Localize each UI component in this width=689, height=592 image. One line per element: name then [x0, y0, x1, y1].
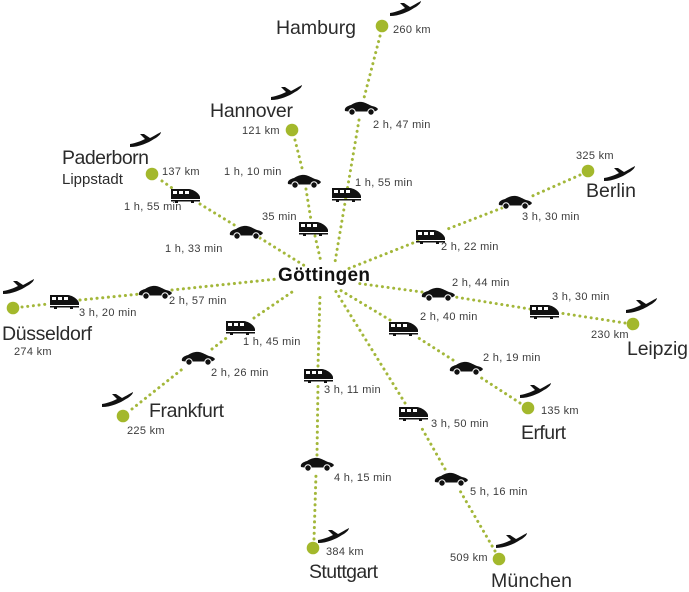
icon: train Leipzig	[530, 305, 559, 319]
icon: plane Erfurt	[520, 383, 551, 398]
icon: train Erfurt	[389, 322, 418, 336]
label: Stuttgart: Stuttgart	[309, 561, 379, 583]
icon: plane Paderborn	[130, 132, 161, 147]
icon: train Stuttgart	[304, 369, 333, 383]
icon: train Hamburg	[332, 188, 361, 202]
dot: Hannover	[286, 124, 298, 136]
time by train: Frankfurt: 1 h, 45 min	[243, 336, 301, 348]
time by car: Erfurt: 2 h, 19 min	[483, 352, 541, 364]
icon: car Düsseldorf	[139, 286, 172, 299]
time by car: Berlin: 3 h, 30 min	[522, 211, 580, 223]
icon: plane Düsseldorf	[3, 279, 34, 294]
time by train: Düsseldorf: 3 h, 20 min	[79, 307, 137, 319]
label: Hannover: Hannover	[210, 100, 294, 122]
icon: train Hannover	[299, 222, 328, 236]
dot: München	[493, 553, 505, 565]
dot: Berlin	[582, 165, 594, 177]
label: Erfurt: Erfurt	[521, 422, 567, 444]
label: Lippstadt: Lippstadt	[62, 171, 124, 188]
icon: train Düsseldorf	[50, 295, 79, 309]
icon: train Berlin	[416, 230, 445, 244]
time by car: Hannover: 1 h, 10 min	[224, 166, 282, 178]
time by train: München: 3 h, 50 min	[431, 418, 489, 430]
dot: Stuttgart	[307, 542, 319, 554]
route: Erfurt	[340, 290, 579, 444]
label: Leipzig: Leipzig	[627, 338, 688, 360]
route: Berlin	[345, 150, 636, 270]
route: Frankfurt	[102, 290, 301, 437]
distance: Hannover: 121 km	[242, 125, 280, 137]
label: Düsseldorf: Düsseldorf	[2, 323, 93, 345]
distance: Berlin: 325 km	[576, 150, 614, 162]
icon: car Hannover	[288, 175, 321, 188]
icon: car Paderborn	[230, 226, 263, 239]
icon: train München	[399, 407, 428, 421]
route: Düsseldorf	[2, 279, 277, 358]
distance: Frankfurt: 225 km	[127, 425, 165, 437]
time by car: München: 5 h, 16 min	[470, 486, 528, 498]
route: Stuttgart	[301, 295, 392, 583]
center label: Göttingen: Göttingen	[278, 265, 370, 286]
label: Berlin: Berlin	[586, 180, 636, 202]
distance: Düsseldorf: 274 km	[14, 346, 52, 358]
distance: Erfurt: 135 km	[541, 405, 579, 417]
icon: car München	[435, 473, 468, 486]
icon: car Frankfurt	[182, 352, 215, 365]
label: München: München	[491, 570, 572, 592]
time by car: Düsseldorf: 2 h, 57 min	[169, 295, 227, 307]
icon: plane München	[496, 533, 527, 548]
label: Paderborn: Paderborn	[62, 147, 149, 169]
distance: Leipzig: 230 km	[591, 329, 629, 341]
time by train: Hannover: 35 min	[262, 211, 297, 223]
time by train: Berlin: 2 h, 22 min	[441, 241, 499, 253]
icon: car Stuttgart	[301, 458, 334, 471]
time by car: Paderborn: 1 h, 33 min	[165, 243, 223, 255]
icon: plane Hamburg	[390, 1, 421, 16]
icon: car Erfurt	[450, 362, 483, 375]
icon: plane Stuttgart	[318, 528, 349, 543]
label: Hamburg: Hamburg	[276, 17, 356, 39]
dot: Frankfurt	[117, 410, 129, 422]
time by train: Stuttgart: 3 h, 11 min	[324, 384, 381, 396]
route: Paderborn	[62, 132, 305, 266]
icon: plane Frankfurt	[102, 392, 133, 407]
time by train: Erfurt: 2 h, 40 min	[420, 311, 478, 323]
distance: Stuttgart: 384 km	[326, 546, 364, 558]
icon: plane Leipzig	[626, 298, 657, 313]
icon: train Frankfurt	[226, 321, 255, 335]
time by train: Paderborn: 1 h, 55 min	[124, 201, 182, 213]
time by train: Leipzig: 3 h, 30 min	[552, 291, 610, 303]
time by car: Stuttgart: 4 h, 15 min	[334, 472, 392, 484]
route: Leipzig	[355, 277, 688, 360]
distance: Hamburg: 260 km	[393, 24, 431, 36]
icon: train Paderborn	[171, 189, 200, 203]
time by car: Hamburg: 2 h, 47 min	[373, 119, 431, 131]
route: Hannover	[210, 85, 328, 262]
dot: Hamburg	[376, 20, 388, 32]
time by car: Frankfurt: 2 h, 26 min	[211, 367, 269, 379]
route: Hamburg	[276, 1, 431, 262]
distance: München: 509 km	[450, 552, 488, 564]
icon: car Leipzig	[422, 288, 455, 301]
dot: Erfurt	[522, 402, 534, 414]
time by train: Hamburg: 1 h, 55 min	[355, 177, 413, 189]
dot: Paderborn	[146, 168, 158, 180]
icon: plane Berlin	[604, 166, 635, 181]
icon: car Berlin	[499, 196, 532, 209]
icon: plane Hannover	[271, 85, 302, 100]
route: München	[335, 290, 572, 592]
icon: car Hamburg	[345, 102, 378, 115]
dot: Düsseldorf	[7, 302, 19, 314]
dot: Leipzig	[627, 318, 639, 330]
time by car: Leipzig: 2 h, 44 min	[452, 277, 510, 289]
label: Frankfurt: Frankfurt	[149, 400, 225, 422]
distance: Paderborn: 137 km	[162, 166, 200, 178]
